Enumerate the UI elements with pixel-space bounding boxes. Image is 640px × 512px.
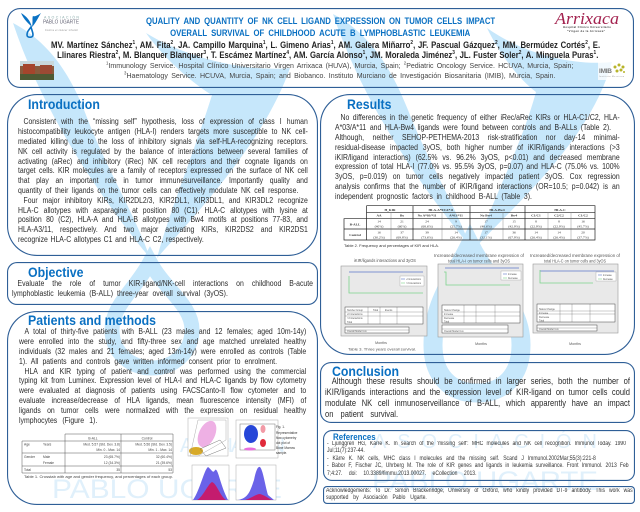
table 2: KIR and HLA frequencies: 16 bbox=[377, 230, 381, 234]
chart: total HLA-I expression survival: Increase bbox=[508, 273, 518, 276]
table 2: KIR and HLA frequencies: HLA-Bw4 bbox=[489, 208, 505, 212]
authors: Llinares Riestra2, M. Blanquer Blanquer3, T. Escámez Martínez4, AM. García Alonso1, JM. Moraleda Jiménez3, JL. Fuster Soler2, A. Minguela Puras1. bbox=[57, 50, 598, 60]
chart: iKIR/ligands interactions and 3yOS survival: >3 interactions bbox=[406, 282, 422, 285]
table 2: KIR and HLA frequencies: (67.9%) bbox=[508, 236, 521, 240]
table 2: KIR and HLA frequencies: (26.4%) bbox=[450, 236, 463, 240]
logo: IMIB bbox=[598, 62, 625, 80]
heading: introduction: Introduction bbox=[28, 96, 100, 112]
introduction text: recognize HLA-C allotypes C1 and HLA-C C2, respectively. bbox=[18, 235, 203, 244]
table 1: patient characteristics: Gender bbox=[24, 455, 36, 459]
introduction text: HLA-C allotypes with asparagine at position 80 (C1), HLA-C allotypes with lysine at bbox=[18, 206, 307, 215]
table 2: KIR and HLA frequencies: C1/C2 bbox=[578, 214, 588, 218]
chart: iKIR/ligands interactions and 3yOS survival: Months bbox=[375, 341, 387, 345]
figure 1: flow cytometry plots: flow cytometry bbox=[276, 436, 297, 440]
methods text: typing kit from Luminex. Expression level of HLA-I and HLA-C ligands by flow cytometry bbox=[19, 376, 306, 385]
logo: IMIB: IMIB bbox=[599, 68, 612, 75]
introduction text: histocompatibility leukocyte antigen (HLA-I) renders targets more susceptible to NK cell- bbox=[18, 127, 307, 136]
table 2: KIR and HLA frequencies: (60%) bbox=[398, 224, 407, 228]
table 2: KIR and HLA frequencies: (26.4%) bbox=[530, 236, 543, 240]
title bbox=[146, 16, 495, 38]
affiliations: 3Haematology Service. HCUVA, Murcia, Spain; and Biobanco. Instituto Murciano de Investigación Biosanitaria (IMIB), Murcia, Spain. bbox=[124, 71, 555, 80]
figure 1: flow cytometry plots: dot plot of bbox=[276, 441, 290, 445]
chart: total HLA-C expression survival: total HLA-C on tumor cells and 3yOS bbox=[544, 258, 606, 264]
table 2: KIR and HLA frequencies: 17 bbox=[484, 230, 488, 234]
introduction text bbox=[18, 117, 308, 244]
table 2: KIR and HLA frequencies: (25.7%) bbox=[450, 224, 463, 228]
results text: iKIR/ligand interactions) (62.5% vs. 96.2% 3yOS, p<0.01) and decreased membrane bbox=[335, 153, 620, 162]
table 1: patient characteristics: Male bbox=[43, 455, 50, 459]
table 1: patient characteristics: Med. 5.57 (Std. Dev. 3.8) bbox=[83, 442, 120, 446]
affiliations bbox=[106, 61, 573, 80]
table 2: KIR and HLA frequencies: (22.9%) bbox=[553, 224, 566, 228]
table 2: KIR and HLA frequencies: 21 bbox=[400, 220, 404, 224]
table 2: KIR and HLA frequencies: 39 bbox=[425, 230, 429, 234]
table 2: KIR and HLA frequencies: 14 bbox=[534, 230, 538, 234]
objective text: lymphoblastic leukemia (B-ALL) three-year overall survival (3yOS). bbox=[12, 289, 228, 298]
photo: hospital building bbox=[20, 61, 54, 80]
introduction text: that play an important role in tumor immunesurveillance. Importantly quality and bbox=[18, 176, 307, 185]
chart: total HLA-C expression survival: Increased/decreased membrane expression of bbox=[530, 253, 621, 258]
chart: total HLA-C expression survival: Status Change bbox=[539, 308, 555, 311]
logo: Arrixaca: "Virgen de la Arrixaca" bbox=[567, 29, 606, 33]
chart: iKIR/ligands interactions and 3yOS survival: Total bbox=[373, 309, 379, 312]
references list: Jul;11(7):237-44. bbox=[327, 448, 365, 454]
objective text: Evaluate the role of tumor KIR-ligand/NK-cell interactions on childhood B-acute bbox=[17, 279, 313, 288]
chart: total HLA-C expression survival: Decrease bbox=[603, 278, 614, 281]
table 1: patient characteristics: 32 (60.4%) bbox=[156, 455, 172, 459]
objective text bbox=[12, 279, 313, 298]
introduction text: HLA-A3/11, respectively. And two major activating KIRs, KIR2DS2 and KIR2DS1 bbox=[18, 225, 307, 234]
conclusion text: Although these results should be confirmed in larger series, both the number of bbox=[332, 376, 630, 386]
chart: total HLA-I expression survival: Status Change bbox=[444, 309, 460, 312]
figure 1: flow cytometry plots bbox=[188, 418, 298, 500]
table 2: KIR and HLA frequencies: (45.7%) bbox=[577, 224, 590, 228]
table 2: KIR and HLA frequencies: (69.8%) bbox=[396, 236, 409, 240]
chart: total HLA-C expression survival: Increase bbox=[603, 274, 613, 277]
chart: iKIR/ligands interactions and 3yOS survival bbox=[340, 258, 428, 352]
table 2: KIR and HLA frequencies: 8 bbox=[558, 220, 560, 224]
chart: total HLA-C expression survival: Overall Model Cox bbox=[539, 328, 559, 331]
references list: 7;4:27. doi: 10.3389/fimmu.2013.00027. eCollection 2013. bbox=[327, 471, 477, 477]
background watermark: Asociación Pablo Ugarte logos: ASOCIACIÓN bbox=[180, 434, 285, 457]
chart: total HLA-C expression survival: Decrease bbox=[539, 316, 550, 319]
table 1: patient characteristics: Years bbox=[43, 442, 52, 446]
table 2: KIR and HLA frequencies: C1/C1 bbox=[531, 214, 541, 218]
chart: total HLA-I expression survival: Increase bbox=[444, 313, 454, 316]
table 2: KIR and HLA frequencies: 20 bbox=[581, 230, 585, 234]
chart: iKIR/ligands interactions and 3yOS survival: Table 3. Three years overall survival. bbox=[348, 346, 416, 352]
chart: total HLA-I expression survival: total HLA-I on tumor cells and 3yOS bbox=[448, 258, 510, 264]
conclusion text: modulate NK cell inmunoserveillance of B-ALL, which apparently have an impact bbox=[325, 398, 630, 408]
methods text: were evaluated at diagnosis of patients using FACSCanto-II flow cytometer and to bbox=[19, 386, 306, 395]
chart: iKIR/ligands interactions and 3yOS survival: Events bbox=[385, 309, 393, 312]
background watermark: Asociación Pablo Ugarte logos: PABLO UGARTE bbox=[52, 474, 282, 504]
table 1: patient characteristics: Min. 1 - Max. 14 bbox=[148, 448, 172, 452]
table 2: KIR and HLA frequencies: 37 bbox=[400, 230, 404, 234]
table 1: patient characteristics: Control bbox=[142, 436, 153, 440]
chart: iKIR/ligands interactions and 3yOS survival: ≤3 interactions bbox=[347, 313, 363, 316]
acknowledgements text: supported by Asociación Pablo Ugarte. bbox=[326, 495, 427, 501]
table 2: KIR and HLA frequencies: HLA-A*03/A*11 bbox=[428, 208, 454, 212]
table 2: KIR and HLA frequencies: 14 bbox=[377, 220, 381, 224]
chart: iKIR/ligands interactions and 3yOS survival: Number Group bbox=[347, 309, 363, 312]
acknowledgements text bbox=[326, 488, 633, 501]
table 2: KIR and HLA frequencies: (22.9%) bbox=[530, 224, 543, 228]
table 2: KIR and HLA frequencies: 36 bbox=[512, 230, 516, 234]
panel: objective bbox=[7, 262, 318, 305]
panel: references bbox=[323, 430, 635, 481]
chart: iKIR/ligands interactions and 3yOS survival: iKIR/ligands interactions and 3yOS bbox=[354, 258, 416, 263]
background watermark: Asociación Pablo Ugarte logos: PABLO UGARTE bbox=[372, 466, 598, 496]
table 2: KIR and HLA frequencies: Control bbox=[349, 233, 361, 237]
table 2: KIR and HLA frequencies: (68.6%) bbox=[421, 224, 434, 228]
acknowledgements text: Acknowledgements: To Dr. Simon Brackenridge, University of Oxford, who kindly provided DT-9 antibody. This work was bbox=[326, 488, 633, 494]
table 2: KIR and HLA frequencies: 14 bbox=[454, 230, 458, 234]
table 2: KIR and HLA frequencies: HLA-C bbox=[554, 208, 566, 212]
methods text: individuals (32 males and 21 females; aged 13m-14y) were enrolled as controls (Table bbox=[19, 347, 306, 356]
figure 1: flow cytometry plots: Representative bbox=[276, 431, 298, 435]
methods text: A total of thirty-five patients with B-ALL (23 males and 12 females; aged 10m-14y) bbox=[24, 327, 306, 336]
results text bbox=[335, 113, 620, 201]
table 2: KIR and HLA frequencies: 24 bbox=[425, 220, 429, 224]
chart: total HLA-I expression survival: Increased/decreased membrane expression of bbox=[434, 253, 525, 258]
conclusion text bbox=[325, 376, 630, 419]
chart: total HLA-I expression survival: Decrease bbox=[444, 317, 455, 320]
table 2: KIR and HLA frequencies: (37.7%) bbox=[577, 236, 590, 240]
title: QUALITY AND QUANTITY OF NK CELL LIGAND EXPRESSION ON TUMOR CELLS IMPACT bbox=[146, 16, 495, 26]
introduction text: Consistent with the “missing self” hypothesis, loss of expression of class I human bbox=[23, 117, 307, 126]
table 2: KIR and HLA frequencies: 9 bbox=[455, 220, 457, 224]
logo: Arrixaca: Hospital Clínico Universitario bbox=[563, 25, 611, 29]
results text: analysis confirms that the number of iKIR/ligand interactions (OR=10.5; p=0.042) is an bbox=[335, 182, 620, 191]
table 1: patient characteristics: Med. 5.56 (Std. Dev. 3.5) bbox=[135, 442, 172, 446]
introduction text: target cells. KIR molecules are a family of receptors expressed on the surface of NK cell bbox=[18, 166, 307, 175]
affiliations: 1Immunology Service. Hospital Clínico Universitario Virgen Arrixaca (HUVA), Murcia, Spain; 2Pediatric Oncology Service. HCUVA, Murcia, Spain; bbox=[106, 61, 573, 70]
table 2: KIR and HLA frequencies: No A*03/*11 bbox=[418, 214, 437, 218]
results text: 3yOS, p=0.019) on tumor cells negatively impacted patient 3yOS. Cox regression bbox=[335, 172, 620, 181]
results text: independent prognostic factors in childhood B-ALL (Table 3). bbox=[335, 192, 532, 201]
introduction text: quantity of their ligands on the tumor cells can effectively modulate NK cell response. bbox=[18, 186, 298, 195]
panel: patients and methods bbox=[7, 311, 318, 505]
conclusion text: on patient survival. bbox=[325, 409, 398, 419]
title: OVERALL SURVIVAL OF CHILDHOOD ACUTE B LYMPHOBLASTIC LEUKEMIA bbox=[170, 28, 470, 38]
table 1: patient characteristics: Female bbox=[43, 461, 54, 465]
results text: No differences in the genetic frequency of either iRec/aRec KIRs or HLA-C1/C2, HLA- bbox=[340, 113, 620, 122]
figure 1: flow cytometry plots: sample. bbox=[276, 451, 287, 455]
table 2: KIR and HLA frequencies: 16 bbox=[581, 220, 585, 224]
chart: iKIR/ligands interactions and 3yOS survival: >3 interactions bbox=[347, 317, 363, 320]
methods text: were enrolled into the study, and fifty-three sex and age matched unrelated healthy bbox=[19, 337, 306, 346]
results text: residual-disease impacted 3yOS, both higher number of iKIR/ligands interactions (>3 bbox=[335, 143, 620, 152]
methods text bbox=[19, 327, 306, 425]
table 2: KIR and HLA frequencies: 15 bbox=[512, 220, 516, 224]
conclusion text: iKIR/ligands interactions and the expression level of KIR-ligand on tumor cells could bbox=[325, 387, 630, 397]
references list: - Ljunggren HG, Kärre K. In search of the 'missing self': MHC molecules and NK cell recognition. Immunol Today. 1990 bbox=[327, 440, 626, 446]
table 2: KIR and HLA frequencies: (26.4%) bbox=[553, 236, 566, 240]
table 2: KIR and HLA frequencies: 17 bbox=[484, 220, 488, 224]
heading: patients and methods: Patients and methods bbox=[28, 312, 156, 328]
chart: total HLA-I expression survival: Total bbox=[444, 320, 450, 324]
table 1: patient characteristics: 53 bbox=[168, 468, 172, 472]
table 2: KIR and HLA frequencies bbox=[344, 205, 596, 248]
logo: Asociación Pablo Ugarte: Contra el cáncer infantil bbox=[45, 29, 78, 32]
heading: objective: Objective bbox=[28, 264, 83, 280]
table 2: KIR and HLA frequencies: (42.9%) bbox=[508, 224, 521, 228]
authors bbox=[51, 40, 600, 60]
table 2: KIR and HLA frequencies: No Bw4 bbox=[480, 214, 492, 218]
panel: header bbox=[7, 8, 634, 88]
chart: iKIR/ligands interactions and 3yOS survival: Overall Model Cox bbox=[347, 330, 367, 333]
results text: expression of total HLA-I (77.0% vs. 95.5% 3yOS, p=0.07) and HLA-C (75.0% vs. 100% bbox=[335, 162, 620, 171]
table 1: patient characteristics: Age bbox=[24, 442, 30, 446]
authors: MV. Martínez Sánchez1, AM. Fita2, JA. Campillo Marquina1, L. Gimeno Arias1, AM. Galera Miñarro2, JF. Pascual Gázquez2, MM. Bermúdez Cortés2, E. bbox=[51, 40, 600, 50]
logo: IMIB: Instituto Murciano bbox=[599, 75, 625, 78]
table 1: patient characteristics: 21 (39.6%) bbox=[156, 461, 172, 465]
table 2: KIR and HLA frequencies: 8 bbox=[535, 220, 537, 224]
table 2: KIR and HLA frequencies: B-ALL bbox=[350, 222, 361, 226]
panel: acknowledgements bbox=[323, 486, 635, 504]
chart: iKIR/ligands interactions and 3yOS survival: ≤3 interactions bbox=[406, 278, 422, 281]
methods text: lymphocytes (Figure 1). bbox=[19, 416, 97, 425]
table 2: KIR and HLA frequencies: Table 2. Frequency and percentages of KIR and HLA. bbox=[344, 244, 439, 248]
table 2: KIR and HLA frequencies: 14 bbox=[557, 230, 561, 234]
heading: results: Results bbox=[347, 96, 392, 112]
methods text: HLA and KIR typing of patient and control was performed using the commercial bbox=[24, 367, 306, 376]
table 2: KIR and HLA frequencies: A*03/*11 bbox=[449, 214, 463, 218]
table 2: KIR and HLA frequencies: AA bbox=[376, 214, 382, 218]
table 2: KIR and HLA frequencies: H_KIR bbox=[384, 208, 396, 212]
methods text: evaluate increase/decrease of HLA ligands, mean fluorescence intensity (MFI) of bbox=[19, 396, 306, 405]
chart: total HLA-I expression survival: Months bbox=[475, 342, 487, 346]
table 1: patient characteristics: 35 bbox=[116, 468, 120, 472]
results text: Although, neither SEHOP-PETHEMA-2013 risk-stratification nor day-14 minimal- bbox=[335, 133, 620, 142]
chart: total HLA-I expression survival: Overall Model Cox bbox=[444, 330, 464, 333]
figure 1: flow cytometry plots: Bone Marrow bbox=[276, 446, 296, 450]
results text: A*03/A*11 and HLA-Bw4 ligands were found between controls and B-ALLs (Table 2). bbox=[335, 123, 611, 132]
chart: total HLA-C expression survival: Months bbox=[569, 342, 581, 346]
table 2: KIR and HLA frequencies: (73.6%) bbox=[421, 236, 434, 240]
logo: Asociación Pablo Ugarte: PABLO UGARTE bbox=[43, 20, 80, 26]
chart: iKIR/ligands interactions and 3yOS survival: Total bbox=[347, 321, 353, 324]
table 1: patient characteristics: 23 (65.7%) bbox=[104, 455, 120, 459]
panel: introduction bbox=[7, 94, 318, 256]
references list bbox=[327, 440, 629, 477]
table 2: KIR and HLA frequencies: (30.2%) bbox=[373, 236, 386, 240]
chart: total HLA-C expression survival bbox=[530, 253, 621, 346]
chart: total HLA-C expression survival: Increase bbox=[539, 312, 549, 315]
heading: references: References bbox=[333, 432, 376, 442]
figure 1: flow cytometry plots: Fig. 1. bbox=[276, 425, 285, 429]
methods text: ligands on tumor cells were normalized with the expression on residual healthy bbox=[19, 406, 306, 415]
table 1: patient characteristics: Total bbox=[24, 468, 31, 472]
table 1: patient characteristics bbox=[22, 434, 174, 479]
panel: results bbox=[320, 94, 635, 355]
logo: Asociación Pablo Ugarte bbox=[21, 13, 80, 38]
chart: total HLA-C expression survival: Total bbox=[539, 320, 545, 322]
table 2: KIR and HLA frequencies: C2/C2 bbox=[554, 214, 564, 218]
table 1: patient characteristics: Min. 0 - Max. 14 bbox=[96, 448, 120, 452]
chart: total HLA-I expression survival: Decrease bbox=[508, 277, 519, 280]
table 1: patient characteristics: B-ALL bbox=[88, 436, 98, 440]
table 2: KIR and HLA frequencies: (32.1%) bbox=[480, 236, 493, 240]
references list: - Babor F, Fischer JC, Uhrberg M. The role of KIR genes and ligands in leukemia surveillance. Front Immunol. 2013 Feb bbox=[327, 463, 629, 469]
table 2: KIR and HLA frequencies: Bx bbox=[400, 214, 404, 218]
introduction text: position 80 (C2), HLA-A and HLA-B allotypes with Bw4 motifs at positions 77-83, and bbox=[18, 215, 307, 224]
panel: conclusion bbox=[320, 362, 635, 423]
table 2: KIR and HLA frequencies: (48.6%) bbox=[480, 224, 493, 228]
references list: - Kärre K. NK cells, MHC class I molecules and the missing self. Scand J Immunol.2002Mar;55(3):221-8 bbox=[327, 456, 596, 462]
table 2: KIR and HLA frequencies: (40%) bbox=[375, 224, 384, 228]
introduction text: NK cell activity is regulated by the balance of interactions between several families of bbox=[18, 147, 307, 156]
table 1: patient characteristics: 12 (34.3%) bbox=[104, 461, 120, 465]
chart: total HLA-I expression survival bbox=[434, 253, 525, 346]
methods text: 1). All patients and controls gave written informed consent prior to enrolment. bbox=[19, 357, 277, 366]
introduction text: Four major inhibitory KIRs, KIR2DL2/3, KIR2DL1, KIR3DL1, and KIR3DL2 recognize bbox=[23, 196, 307, 205]
logo: Asociación Pablo Ugarte: ASOCIACIÓN bbox=[44, 14, 79, 20]
introduction text: activating (aRec) and inhibitory (iRec) NK cell receptors and their cognate ligands on bbox=[18, 157, 307, 166]
table 1: patient characteristics: Table 1. Crosstab with age and gender frequency, and percentages of each group. bbox=[24, 475, 173, 479]
introduction text: mediated killing due to the loss of inhibitory signals via self-HLA-recognizing receptors. bbox=[18, 137, 307, 146]
logo: Arrixaca: Arrixaca bbox=[554, 9, 619, 28]
heading: conclusion: Conclusion bbox=[332, 363, 399, 379]
background watermark: Asociación Pablo Ugarte logos: ASOCIACIÓN bbox=[373, 430, 597, 453]
table 2: KIR and HLA frequencies: Bw4 bbox=[511, 214, 518, 218]
